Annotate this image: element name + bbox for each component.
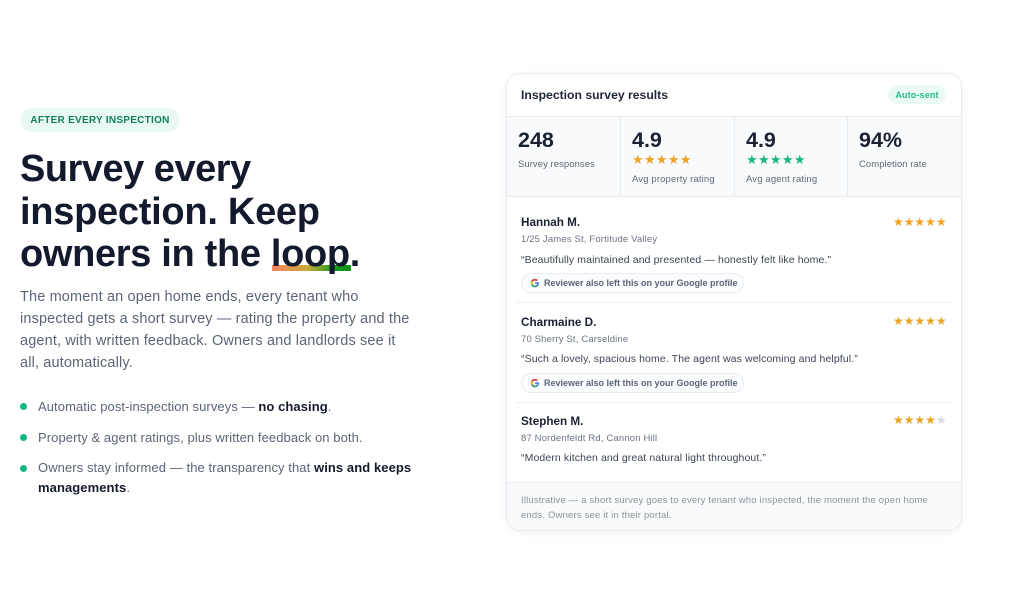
- stat: completion rate: [859, 128, 927, 170]
- headline: inspection. Keep: [20, 191, 320, 233]
- card title: Inspection survey results: [521, 88, 668, 102]
- review: Hannah M.: [521, 215, 947, 293]
- review: Stephen M.: [521, 413, 947, 464]
- review: Hannah M.: “Beautifully maintained and presented — honestly felt like home.”: [521, 254, 831, 266]
- review: Stephen M.: ★★★★★: [893, 413, 947, 427]
- review: Charmaine D.: ★★★★★: [893, 314, 947, 328]
- badge: auto-sent: Auto-sent: [895, 90, 939, 100]
- stat: agent rating: ★★★★★: [746, 152, 806, 167]
- stat: agent rating: Avg agent rating: [746, 174, 817, 185]
- stats row: [507, 116, 961, 197]
- panel: survey results card: [506, 73, 962, 531]
- stat: completion rate: Completion rate: [859, 159, 927, 170]
- highlight underline: loop: [272, 265, 351, 271]
- card footer note: ends. Owners see it in their portal.: [521, 510, 672, 521]
- card footer note: Illustrative — a short survey goes to every tenant who inspected, the moment the open home: [521, 495, 928, 506]
- review: Stephen M.: Stephen M.: [521, 415, 583, 428]
- review: Charmaine D.: Charmaine D.: [521, 316, 596, 329]
- stat: agent rating: [746, 128, 817, 185]
- badge: after every inspection: [20, 108, 180, 132]
- headline: owners in the loop.: [20, 233, 360, 275]
- stat: property rating: Avg property rating: [632, 174, 715, 185]
- stat: agent rating: 4.9: [746, 128, 776, 152]
- intro paragraph: [20, 289, 410, 371]
- bullet list: [20, 399, 411, 495]
- review: Charmaine D.: Reviewer also left this on your Google profile: [544, 378, 738, 388]
- headline: Survey every: [20, 148, 251, 190]
- stat: property rating: 4.9: [632, 128, 662, 152]
- review: Charmaine D.: “Such a lovely, spacious home. The agent was welcoming and helpful.”: [521, 353, 858, 365]
- review: Charmaine D.: [521, 314, 947, 393]
- intro paragraph: agent, with written feedback. Owners and landlords see it: [20, 333, 396, 349]
- intro paragraph: all, automatically.: [20, 355, 133, 371]
- intro paragraph: The moment an open home ends, every tenant who: [20, 289, 359, 305]
- review: Hannah M.: 1/25 James St, Fortitude Valley: [521, 234, 657, 245]
- headline: [20, 148, 360, 275]
- badge: auto-sent: [888, 85, 946, 104]
- stat: survey responses: 248: [518, 128, 554, 152]
- stat: completion rate: 94%: [859, 128, 902, 152]
- bullet list: Property & agent ratings, plus written feedback on both.: [38, 430, 363, 445]
- review: Stephen M.: 87 Nordenfeldt Rd, Cannon Hill: [521, 433, 657, 444]
- stat: property rating: [632, 128, 715, 185]
- review: Hannah M.: Hannah M.: [521, 216, 580, 229]
- stat: survey responses: [518, 128, 595, 170]
- badge: after every inspection: AFTER EVERY INSPECTION: [30, 115, 170, 126]
- review: Stephen M.: “Modern kitchen and great natural light throughout.”: [521, 452, 766, 464]
- stat: survey responses: Survey responses: [518, 159, 595, 170]
- card footer note: [507, 482, 961, 530]
- bullet list: Automatic post-inspection surveys — no chasing.: [38, 399, 331, 414]
- bullet list: Owners stay informed — the transparency that wins and keeps: [38, 460, 411, 475]
- review: Hannah M.: ★★★★★: [893, 215, 947, 229]
- review: Hannah M.: Reviewer also left this on your Google profile: [544, 278, 738, 288]
- review: Charmaine D.: 70 Sherry St, Carseldine: [521, 334, 628, 345]
- bullet list: managements.: [38, 480, 130, 495]
- stat: property rating: ★★★★★: [632, 152, 692, 167]
- intro paragraph: inspected gets a short survey — rating the property and the: [20, 311, 410, 327]
